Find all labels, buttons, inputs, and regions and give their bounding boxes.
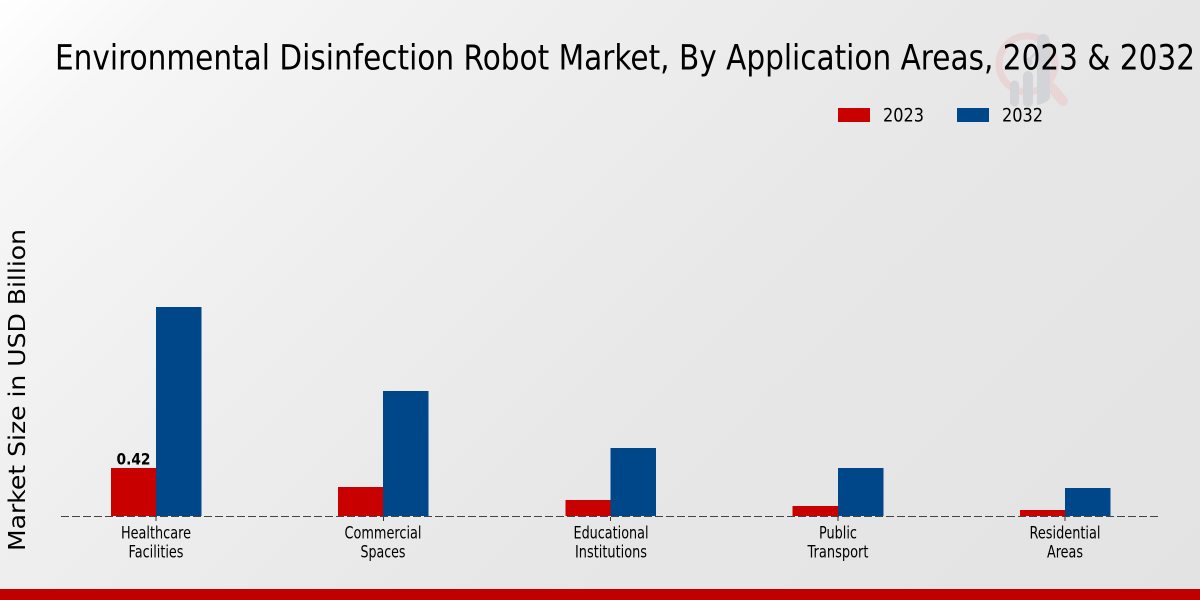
legend item: 2023: 2023 [883, 104, 924, 126]
watermark logo [999, 34, 1063, 105]
category label: Public Transport [807, 524, 869, 562]
legend item: 2032: 2032 [1002, 104, 1043, 126]
category label: Commercial Spaces [344, 524, 422, 562]
y-axis label: Market Size in USD Billion [5, 229, 31, 551]
category label: Residential Areas: Areas [1047, 542, 1083, 562]
x-axis ticks [156, 517, 1065, 521]
group: Residential Areas [1020, 488, 1110, 516]
x-axis baseline [61, 516, 1159, 518]
category label: Healthcare Facilities: Healthcare [121, 524, 191, 542]
group: Healthcare Facilities [111, 307, 202, 516]
category label: Commercial Spaces: Commercial [344, 524, 422, 542]
category label: Public Transport: Public [819, 524, 857, 542]
group: Educational Institutions [566, 448, 656, 516]
bar chart [111, 307, 1110, 516]
category label: Commercial Spaces: Spaces [360, 542, 406, 562]
legend item: 2023 [838, 104, 924, 126]
value label: 0.42 [116, 450, 150, 468]
category label: Public Transport: Transport [807, 542, 869, 562]
category label: Educational Institutions [574, 524, 648, 562]
category label: Residential Areas: Residential [1030, 524, 1100, 542]
category label: Healthcare Facilities [121, 524, 191, 562]
category label: Residential Areas [1030, 524, 1100, 562]
category label: Educational Institutions: Institutions [575, 542, 647, 562]
legend item: 2032 [957, 104, 1043, 126]
group: Commercial Spaces [338, 391, 428, 516]
group: Public Transport [792, 468, 884, 516]
category label: Educational Institutions: Educational [574, 524, 648, 542]
category label: Healthcare Facilities: Facilities [128, 542, 184, 562]
footer bar [0, 589, 1200, 600]
legend [838, 104, 1043, 126]
